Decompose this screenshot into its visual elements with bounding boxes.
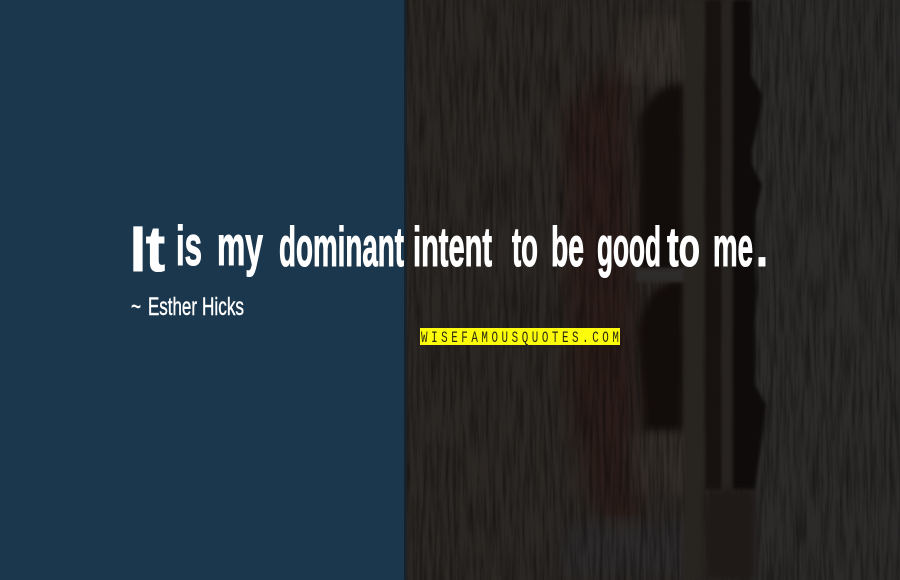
panel: navy blue left panel xyxy=(0,0,406,580)
heading: quote text: is xyxy=(176,214,202,277)
heading: quote text: be xyxy=(551,215,584,278)
heading: quote text: intent xyxy=(413,215,492,278)
heading: quote text: to xyxy=(512,215,538,278)
callout: yellow website badge: WISEFAMOUSQUOTES.COM xyxy=(421,330,619,348)
text: author attribution: ~ xyxy=(131,293,141,321)
heading: quote text: . xyxy=(756,215,768,278)
heading: quote text: dominant xyxy=(279,215,404,278)
text: author attribution: Hicks xyxy=(202,293,244,321)
text: author attribution xyxy=(131,293,244,321)
heading: quote text: to xyxy=(667,215,700,278)
panel: dark wood texture background xyxy=(404,0,900,580)
text: author attribution: Esther xyxy=(148,293,197,321)
heading: quote text: good xyxy=(597,215,661,278)
heading: quote text: me xyxy=(713,215,753,278)
heading: quote text xyxy=(130,213,768,285)
heading: quote text: It xyxy=(130,213,165,285)
heading: quote text: my xyxy=(217,214,263,277)
